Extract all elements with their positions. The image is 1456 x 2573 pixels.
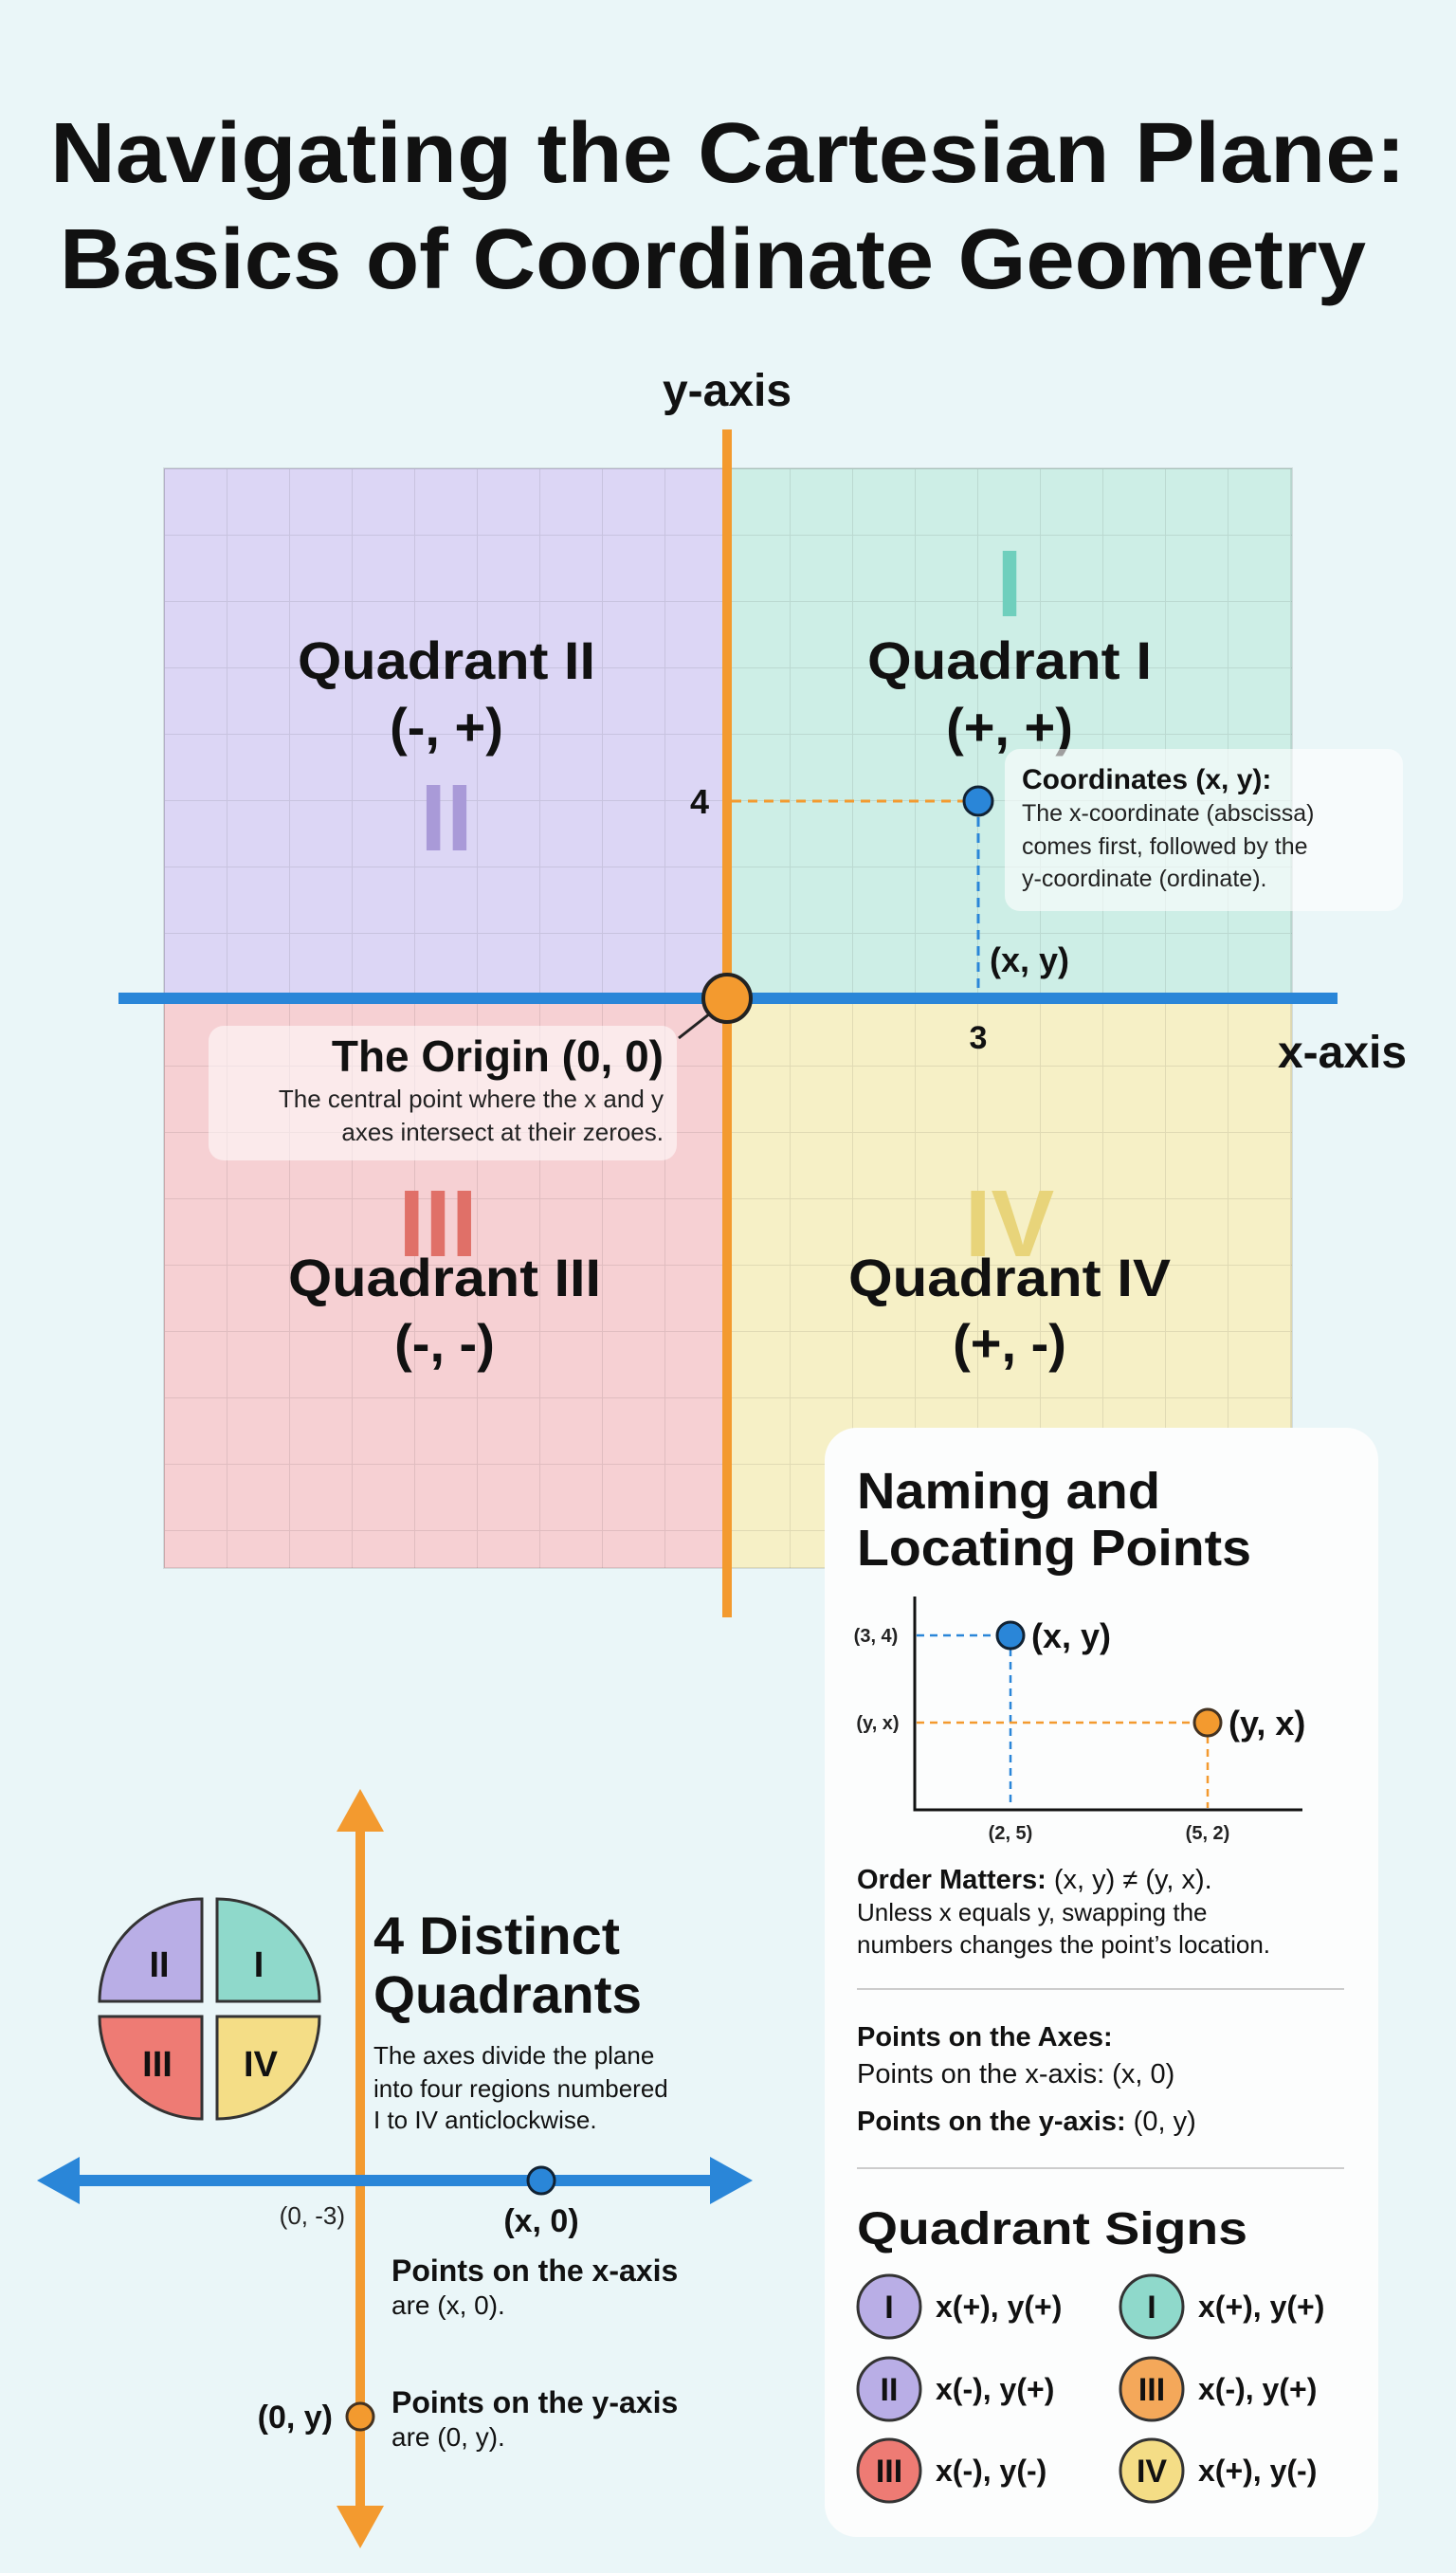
text: points on the axes: Points on the y-axis: (0, y) [857, 2107, 1196, 2137]
heading: Locating Points [857, 1520, 1251, 1577]
point on y-axis: Points on the y-axis [391, 2385, 678, 2419]
mini chart: (3, 4) [854, 1626, 898, 1647]
callout: origin: The Origin (0, 0) [332, 1031, 664, 1081]
origin point [703, 975, 751, 1022]
mini chart: (y, x) [856, 1713, 900, 1734]
quadrant labels: (+, -) [953, 1313, 1066, 1373]
quadrant sign list: IV [1137, 2454, 1167, 2490]
quadrant plane [164, 468, 1292, 1568]
icon: four quadrants circle: I [254, 1945, 264, 1985]
roman numerals [398, 531, 1055, 1277]
text: points on the axes: Points on the x-axis: (x, 0) [857, 2059, 1174, 2089]
icon: four quadrants circle [100, 1899, 319, 2119]
point on x-axis [280, 2167, 678, 2320]
mini chart: (y, x) [1228, 1704, 1305, 1743]
point on y-axis [258, 2385, 678, 2452]
text: 4 distinct quadrants [373, 1906, 668, 2134]
mini chart [854, 1597, 1305, 1844]
text: 4 distinct quadrants: Quadrants [373, 1964, 642, 2024]
heading [857, 1463, 1251, 1577]
point (x,y) with projections: (x, y) [990, 940, 1069, 979]
quadrant sign list: x(-), y(+) [1198, 2372, 1317, 2406]
mini chart: (5, 2) [1186, 1823, 1229, 1844]
text: 4 distinct quadrants: 4 Distinct [373, 1906, 620, 1965]
point (x,y) with projections: 3 [970, 1020, 987, 1056]
roman numerals: III [398, 1171, 478, 1277]
quadrant labels: (+, +) [946, 697, 1073, 757]
title: Navigating the Cartesian Plane: [50, 106, 1406, 201]
quadrant sign list: x(-), y(-) [936, 2454, 1046, 2488]
callout: coordinates: Coordinates (x, y): [1022, 764, 1271, 795]
text: 4 distinct quadrants: I to IV anticlockwise. [373, 2106, 597, 2134]
axis labels: x-axis [1278, 1028, 1407, 1078]
callout: coordinates: The x-coordinate (abscissa) [1022, 800, 1314, 827]
axis labels: y-axis [663, 366, 792, 416]
icon: four quadrants circle: IV [244, 2045, 279, 2085]
quadrant sign list: III [1138, 2372, 1165, 2408]
arrow: vertical orange axis [337, 1789, 384, 2548]
mini chart: (x, y) [1031, 1616, 1111, 1655]
text: points on the axes [857, 2022, 1196, 2137]
point on x-axis: are (x, 0). [391, 2290, 505, 2320]
text: points on the axes: Points on the Axes: [857, 2022, 1113, 2053]
quadrant labels: Quadrant IV [848, 1248, 1171, 1307]
icon: four quadrants circle: III [142, 2045, 173, 2085]
heading: quadrant signs: Quadrant Signs [857, 2204, 1247, 2254]
text: order matters: numbers changes the point’s location. [857, 1930, 1270, 1959]
quadrant sign list [858, 2275, 1324, 2502]
callout: coordinates: comes first, followed by the [1022, 833, 1308, 860]
quadrant sign list: x(-), y(+) [936, 2372, 1054, 2406]
quadrant labels: (-, -) [394, 1313, 495, 1373]
panel: naming and locating points [825, 1428, 1378, 2537]
point on y-axis: are (0, y). [391, 2422, 505, 2452]
axes [118, 429, 1338, 1617]
point (x,y) with projections [690, 782, 1069, 1056]
quadrant sign list: I [884, 2290, 894, 2326]
text: 4 distinct quadrants: into four regions numbered [373, 2074, 668, 2103]
title [50, 106, 1406, 307]
icon: four quadrants circle: II [149, 1945, 170, 1985]
point on y-axis: (0, y) [258, 2400, 333, 2436]
text: order matters [857, 1865, 1270, 1959]
quadrant labels: Quadrant III [288, 1248, 601, 1307]
callout: origin: axes intersect at their zeroes. [341, 1118, 664, 1146]
quadrant labels [288, 630, 1171, 1373]
callout: origin [209, 1007, 719, 1160]
callout: coordinates [1005, 749, 1403, 911]
point on x-axis: Points on the x-axis [391, 2254, 678, 2288]
quadrant sign list: x(+), y(+) [936, 2290, 1062, 2324]
text: order matters: Order Matters: (x, y) ≠ (y, x). [857, 1865, 1212, 1895]
quadrant sign list: x(+), y(+) [1198, 2290, 1324, 2324]
title: Basics of Coordinate Geometry [60, 212, 1366, 307]
point (x,y) with projections: 4 [690, 782, 709, 821]
roman numerals: I [996, 531, 1023, 637]
arrow: horizontal blue axis [37, 2157, 753, 2204]
axis labels [663, 366, 1407, 1078]
mini chart: (2, 5) [989, 1823, 1032, 1844]
quadrant sign list: I [1147, 2290, 1156, 2326]
text: order matters: Unless x equals y, swapping the [857, 1898, 1208, 1926]
point on x-axis: (0, -3) [280, 2201, 345, 2230]
roman numerals: II [420, 765, 473, 871]
point on x-axis: (x, 0) [503, 2203, 579, 2239]
callout: coordinates: y-coordinate (ordinate). [1022, 866, 1266, 892]
quadrant labels: Quadrant II [298, 630, 595, 690]
callout: origin: The central point where the x and y [279, 1085, 664, 1113]
quadrant labels: (-, +) [390, 697, 503, 757]
quadrant sign list: II [881, 2372, 898, 2408]
quadrant sign list: x(+), y(-) [1198, 2454, 1317, 2488]
quadrant sign list: III [876, 2454, 902, 2490]
quadrant labels: Quadrant I [867, 630, 1152, 690]
roman numerals: IV [965, 1171, 1055, 1277]
text: 4 distinct quadrants: The axes divide the plane [373, 2041, 654, 2070]
heading: Naming and [857, 1463, 1160, 1520]
